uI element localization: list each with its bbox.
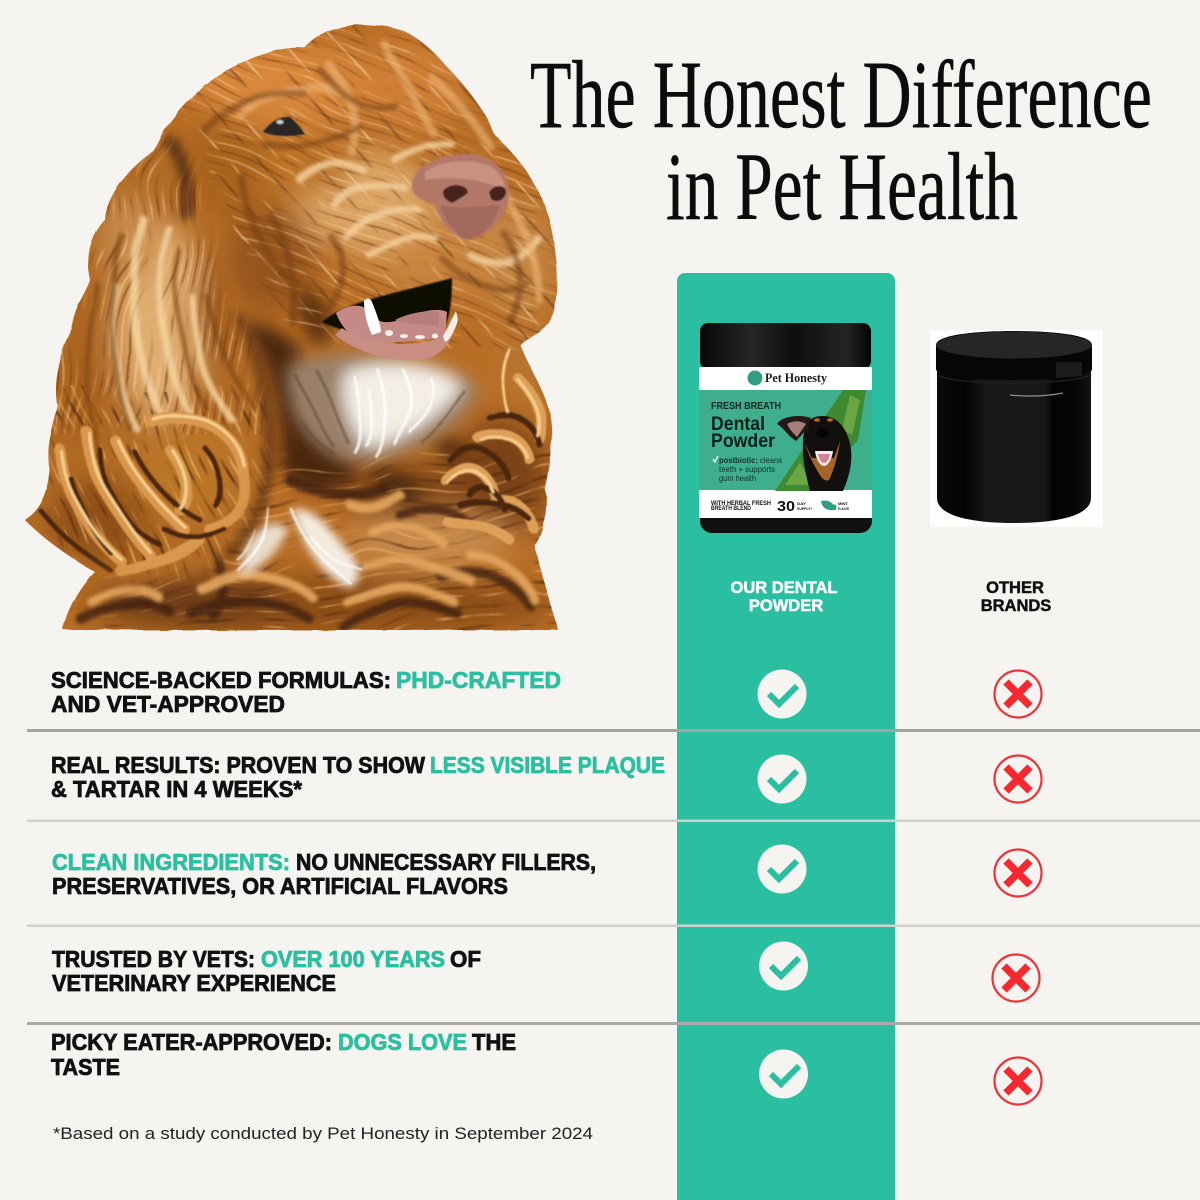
- jar label text: Powder: [711, 431, 776, 452]
- open mouth: [322, 278, 458, 360]
- jar label: dog on grass: [775, 390, 866, 491]
- column header: our dental powder: POWDER: [749, 597, 823, 615]
- white beard: [287, 353, 480, 462]
- long ear locks: [87, 215, 250, 450]
- row 4 text: trusted by vets: OVER 100 YEARS: [261, 946, 445, 972]
- icon: cross row 3: [994, 850, 1042, 896]
- icon: cross row 5: [994, 1058, 1042, 1104]
- row 5 text: picky eater-approved: PICKY EATER-APPROVED:: [51, 1029, 332, 1055]
- icon: check row 5: [759, 1050, 808, 1098]
- column header: other brands: OTHER: [986, 579, 1044, 597]
- head locks: [205, 45, 540, 322]
- column header: our dental powder: [731, 579, 837, 615]
- jar bottom label text: FLAVOR: [838, 506, 849, 511]
- row 2 text: real results: LESS VISIBLE PLAQUE: [430, 752, 665, 778]
- row 3 text: clean ingredients: CLEAN INGREDIENTS:: [52, 849, 290, 875]
- jar bottom label text: MINT: [838, 501, 849, 506]
- row 1 text: science-backed formulas: SCIENCE-BACKED FORMULAS:: [51, 667, 391, 693]
- jar bottom label text: SUPPLY*: [797, 506, 812, 511]
- illustration: smiling golden-brown cockapoo: [25, 24, 558, 631]
- icon: check row 2: [758, 754, 806, 804]
- head colour masses: [80, 40, 560, 635]
- icon: check row 1: [758, 670, 806, 718]
- white chest patch: [240, 509, 359, 588]
- jar bottom label text: [711, 498, 849, 515]
- column header: other brands: [981, 579, 1051, 615]
- jar label text: FRESH BREATH: [711, 400, 781, 412]
- fur silhouette: [25, 24, 558, 630]
- icon: check row 3: [758, 844, 806, 894]
- row 1 text: science-backed formulas: [51, 667, 561, 717]
- icon: check row 4: [759, 942, 808, 990]
- row 4 text: trusted by vets: [52, 946, 481, 996]
- row 4 text: trusted by vets: TRUSTED BY VETS:: [52, 946, 255, 972]
- row 2 text: real results: & TARTAR IN 4 WEEKS*: [51, 776, 302, 802]
- row 5 text: picky eater-approved: DOGS LOVE: [338, 1029, 467, 1055]
- dark hollows behind ear and jaw: [240, 285, 470, 501]
- row 5 text: picky eater-approved: [51, 1029, 516, 1080]
- jar label text: [711, 400, 782, 483]
- column header: our dental powder: OUR DENTAL: [731, 579, 837, 597]
- footnote: *Based on a study conducted by Pet Honesty in September 2024: [53, 1124, 593, 1143]
- ear shadow cast on head: [225, 315, 267, 555]
- panel: our dental powder column: [677, 273, 895, 1200]
- row dividers: [27, 729, 1200, 1025]
- dark crease above the ear: [168, 138, 188, 218]
- neck and chest fine hair: [60, 450, 560, 640]
- nose: [412, 154, 509, 240]
- curl clumps: [40, 415, 246, 570]
- jar label text: gum health: [719, 473, 756, 483]
- row 2 text: real results: [51, 752, 665, 802]
- row 1 text: science-backed formulas: PHD-CRAFTED: [396, 667, 561, 693]
- jar label text: Dental: [711, 414, 765, 435]
- row 4 text: trusted by vets: OF: [450, 946, 481, 972]
- teeth: [364, 298, 381, 335]
- title: in Pet Health: [666, 133, 1018, 240]
- jar bottom label text: BREATH BLEND: [711, 506, 752, 512]
- jar brand logo: Pet Honesty: [765, 371, 828, 385]
- row 5 text: picky eater-approved: TASTE: [51, 1054, 120, 1080]
- icon: cross row 4: [992, 954, 1040, 1002]
- row 3 text: clean ingredients: NO UNNECESSARY FILLERS,: [296, 849, 596, 875]
- jar bottom label text: WITH HERBAL FRESH: [711, 501, 771, 507]
- icon: cross row 2: [994, 756, 1042, 802]
- long curly ear: [25, 122, 272, 592]
- title: [530, 41, 1152, 240]
- product jar: Pet Honesty dental powder: [699, 323, 872, 533]
- other brands plain black jar: [930, 330, 1103, 527]
- row 3 text: clean ingredients: PRESERVATIVES, OR ARTIFICIAL FLAVORS: [52, 873, 508, 899]
- row 5 text: picky eater-approved: THE: [472, 1029, 516, 1055]
- right curls: [445, 350, 541, 540]
- chest locks: [80, 480, 535, 628]
- fine hair on head: [183, 25, 556, 350]
- row 4 text: trusted by vets: VETERINARY EXPERIENCE: [52, 970, 336, 996]
- eye: [263, 117, 305, 136]
- row 2 text: real results: REAL RESULTS: PROVEN TO SHOW: [51, 752, 425, 778]
- jar label text: teeth + supports: [719, 464, 775, 474]
- column header: other brands: BRANDS: [981, 597, 1051, 615]
- jar bottom label text: 30: [777, 498, 795, 515]
- icon: cross row 1: [994, 670, 1042, 718]
- jar bottom label text: DAY: [797, 501, 806, 506]
- row 1 text: science-backed formulas: AND VET-APPROVED: [51, 691, 285, 717]
- jar label text: postbiotic: cleans: [719, 455, 782, 465]
- row 3 text: clean ingredients: [52, 849, 596, 899]
